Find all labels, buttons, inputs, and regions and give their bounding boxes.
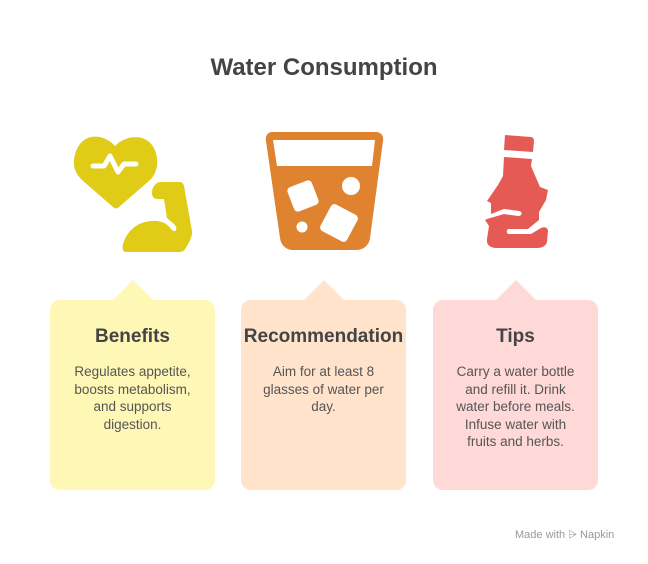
- title: Water Consumption: [210, 54, 438, 81]
- footer: made with napkin: Made with ⩥ Napkin: [515, 529, 614, 541]
- icon: bottle: [485, 135, 548, 248]
- arm: [123, 182, 192, 252]
- panel: benefits: [50, 300, 215, 490]
- text: benefits: Regulates appetite, boosts metabolism, and supports digestion.: [74, 364, 191, 432]
- heading: tips: Tips: [496, 326, 535, 347]
- icon: glass with ice: [266, 132, 384, 250]
- text: tips: Carry a water bottle and refill it. Drink water before meals. Infuse water with fruits and herbs.: [456, 364, 575, 449]
- panel: recommendation: [241, 300, 406, 490]
- heading: benefits: Benefits: [95, 326, 170, 347]
- text: recommendation: Aim for at least 8 glasses of water per day.: [263, 364, 384, 414]
- panel: tips: [433, 300, 598, 490]
- heading: recommendation: Recommendation: [244, 326, 403, 347]
- heart: [74, 137, 157, 208]
- icon: heart and arm: [74, 136, 192, 252]
